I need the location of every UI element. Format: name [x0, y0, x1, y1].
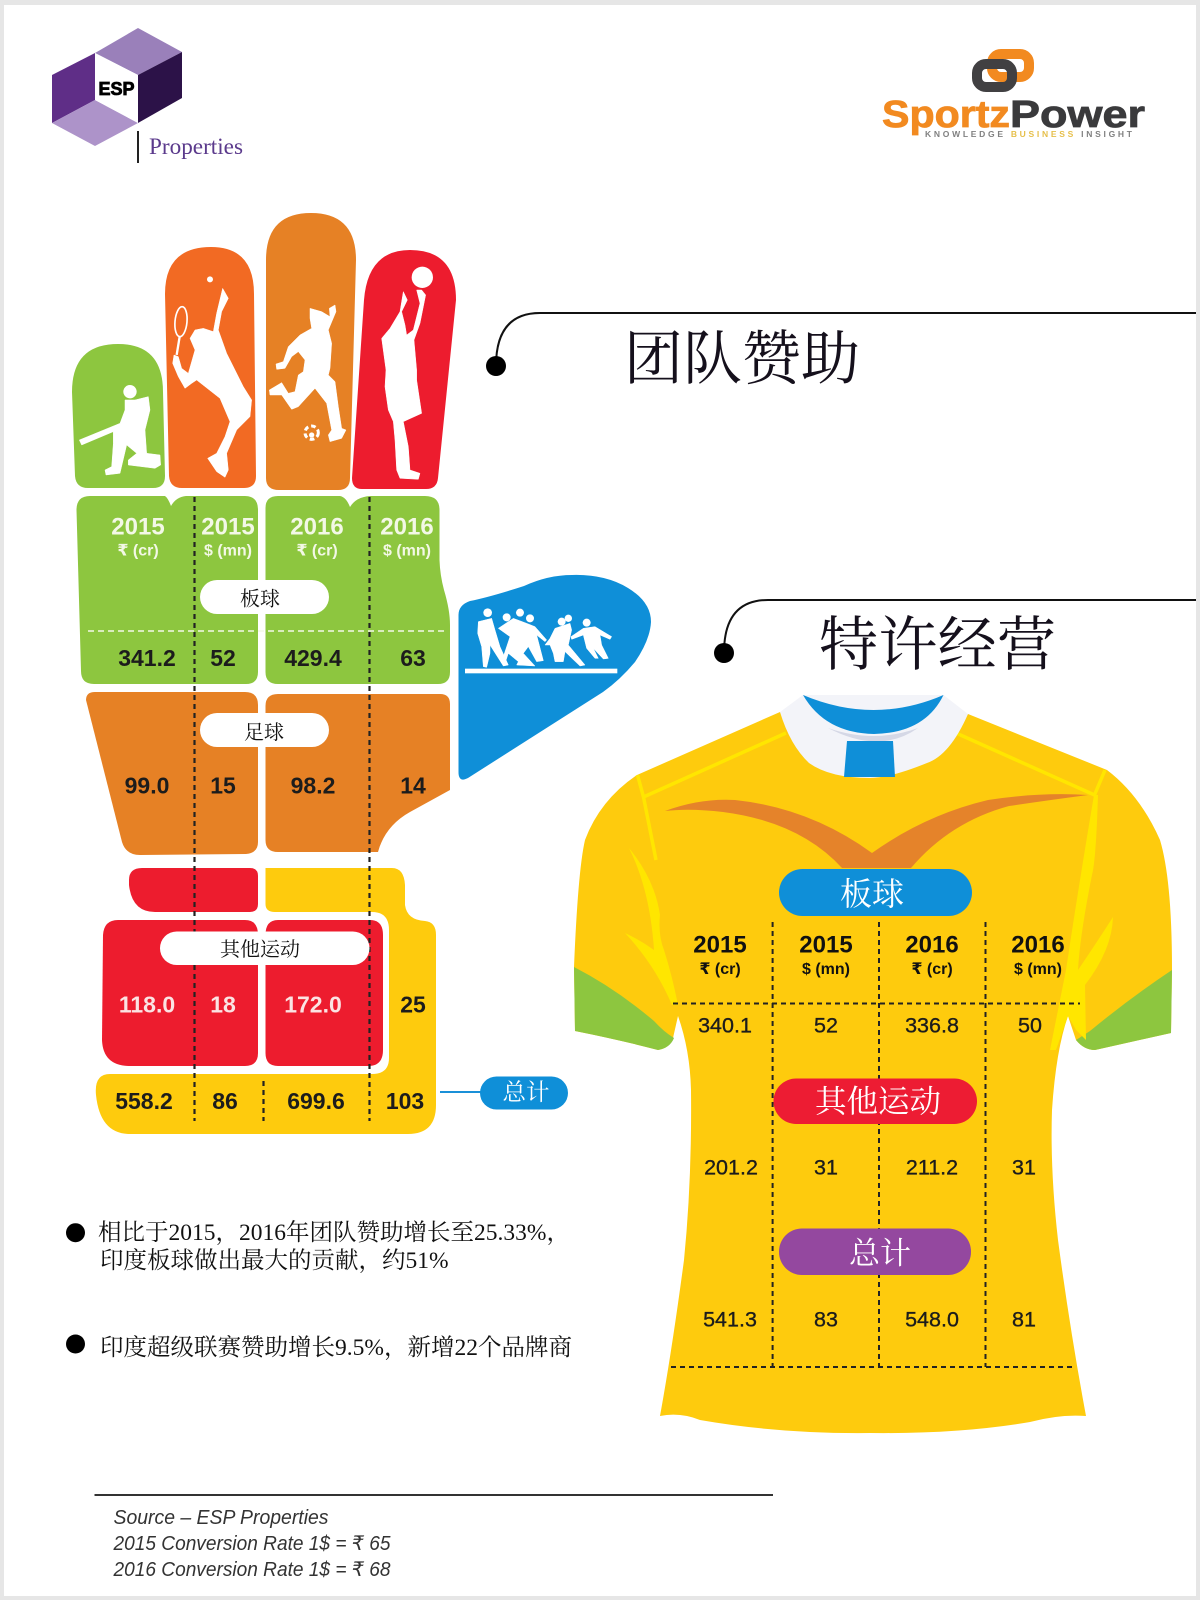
- source footer: 2016 Conversion Rate 1$ = ₹ 68: [113, 1559, 390, 1581]
- label pill: cricket: [200, 580, 329, 614]
- source footer: Source – ESP Properties: [114, 1507, 328, 1529]
- column headers: 2016: [1011, 932, 1065, 958]
- label pill: total: 总计: [849, 1236, 911, 1271]
- values: cricket: 52: [814, 1014, 838, 1038]
- jersey illustration: merchandising: [574, 695, 1172, 1433]
- collar: [780, 695, 968, 778]
- values: total: 83: [814, 1308, 838, 1332]
- label pill: other sports: [774, 1078, 977, 1124]
- column headers: $ (mn): [1014, 961, 1062, 978]
- column headers: $ (mn): [383, 542, 431, 560]
- column headers: 2016: [905, 932, 959, 958]
- values: cricket: 340.1: [698, 1014, 752, 1038]
- values: football: 14: [400, 772, 426, 798]
- source footer: 2015 Conversion Rate 1$ = ₹ 65: [113, 1533, 391, 1555]
- column headers: 2016: [290, 514, 344, 540]
- values: total: 548.0: [905, 1308, 959, 1332]
- values: other sports: 201.2: [704, 1156, 758, 1180]
- values: football: 98.2: [291, 772, 335, 798]
- label pill: cricket: 板球: [840, 876, 904, 912]
- column headers: 2015: [201, 514, 255, 540]
- total callout: 总计: [502, 1079, 550, 1106]
- values: other sports: 31: [1012, 1156, 1036, 1180]
- column headers: $ (mn): [204, 542, 252, 560]
- column headers: ₹ (cr): [911, 961, 953, 978]
- values: total: 81: [1012, 1308, 1036, 1332]
- values: other sports: 25: [400, 992, 426, 1018]
- values: cricket: 52: [210, 645, 236, 671]
- column dividers: [194, 497, 370, 1121]
- logo: SportzPower: Sportz: [882, 94, 1010, 136]
- column headers: ₹ (cr): [117, 542, 159, 560]
- column headers: ₹ (cr): [296, 542, 338, 560]
- source footer: [94, 1495, 773, 1581]
- logo: ESP Properties: ESP: [98, 79, 135, 99]
- values: total: 699.6: [287, 1088, 345, 1114]
- column headers: $ (mn): [802, 961, 850, 978]
- bullet text: IPL sponsorship growth: 印度超级联赛赞助增长9.5%，新增22个品牌商: [100, 1334, 572, 1361]
- label pill: other sports: 其他运动: [220, 938, 300, 961]
- finger: cricket: [72, 344, 165, 488]
- bullet text: team sponsorship growth: 印度板球做出最大的贡献，约51%: [100, 1247, 449, 1274]
- values: other sports: 31: [814, 1156, 838, 1180]
- callout line: merchandising: [714, 600, 1196, 663]
- values: total: 86: [212, 1088, 238, 1114]
- values: cricket: [118, 645, 426, 671]
- label pill: other sports: [160, 932, 370, 965]
- values: total: [703, 1308, 1036, 1332]
- heading: team sponsorship: 团队赞助: [624, 326, 860, 392]
- palm: other sports row: [102, 868, 383, 1066]
- column headers: [693, 932, 1065, 978]
- logo: SportzPower: Power: [1010, 94, 1145, 136]
- finger: football: [266, 213, 356, 490]
- values: other sports: [704, 1156, 1036, 1180]
- values: total: [115, 1088, 424, 1114]
- column headers: 2016: [380, 514, 434, 540]
- label pill: other sports: 其他运动: [815, 1084, 941, 1119]
- total callout: [440, 1076, 568, 1110]
- jersey seams and flames: [625, 733, 1113, 1050]
- jersey body: [574, 712, 1172, 1433]
- label pill: football: [200, 713, 329, 747]
- values: other sports: 118.0: [119, 992, 175, 1018]
- logo: SportzPower: [882, 54, 1145, 139]
- callout line: team sponsorship: [486, 313, 1196, 376]
- values: football: [125, 772, 426, 798]
- column headers: [111, 514, 434, 560]
- column headers: 2015: [111, 514, 165, 540]
- values: cricket: 63: [400, 645, 426, 671]
- bullet text: team sponsorship growth: 相比于2015，2016年团队赞助增长至25.33%，: [98, 1219, 570, 1246]
- values: other sports: 211.2: [906, 1156, 958, 1180]
- thumb: kabaddi: [458, 575, 651, 780]
- palm: football row: [86, 692, 450, 855]
- chest swoosh: [665, 794, 1088, 868]
- palm: cricket row: [76, 496, 450, 684]
- values: football: 15: [210, 772, 236, 798]
- palm: total band: [96, 868, 436, 1134]
- values: total: 103: [386, 1088, 424, 1114]
- values: total: 541.3: [703, 1308, 757, 1332]
- label pill: total: [779, 1228, 971, 1275]
- values: cricket: 336.8: [905, 1014, 959, 1038]
- table gridlines: [671, 922, 1080, 1367]
- heading: merchandising: 特许经营: [819, 612, 1056, 678]
- logo: SportzPower: KNOWLEDGE BUSINESS INSIGHT: [925, 129, 1133, 139]
- finger: tennis: [165, 247, 256, 488]
- column headers: 2015: [799, 932, 853, 958]
- values: football: 99.0: [125, 772, 169, 798]
- column headers: ₹ (cr): [699, 961, 741, 978]
- values: other sports: [119, 992, 426, 1018]
- values: cricket: 341.2: [118, 645, 176, 671]
- values: cricket: 429.4: [284, 645, 342, 671]
- values: cricket: 50: [1018, 1014, 1042, 1038]
- label pill: cricket: 板球: [240, 588, 280, 610]
- glove illustration: team sponsorship: [72, 213, 651, 1134]
- values: total: 558.2: [115, 1088, 173, 1114]
- kabaddi players: [465, 608, 617, 673]
- values: other sports: 18: [210, 992, 236, 1018]
- logo: ESP Properties: [52, 28, 243, 163]
- sleeve cuffs: [574, 967, 1172, 1050]
- finger: basketball: [352, 250, 456, 489]
- label pill: football: 足球: [244, 721, 284, 744]
- logo: ESP Properties: Properties: [149, 134, 243, 159]
- column headers: 2015: [693, 932, 747, 958]
- label pill: cricket: [779, 869, 972, 916]
- values: other sports: 172.0: [284, 992, 342, 1018]
- bullet text: team sponsorship growth: [66, 1219, 570, 1274]
- values: cricket: [698, 1014, 1042, 1038]
